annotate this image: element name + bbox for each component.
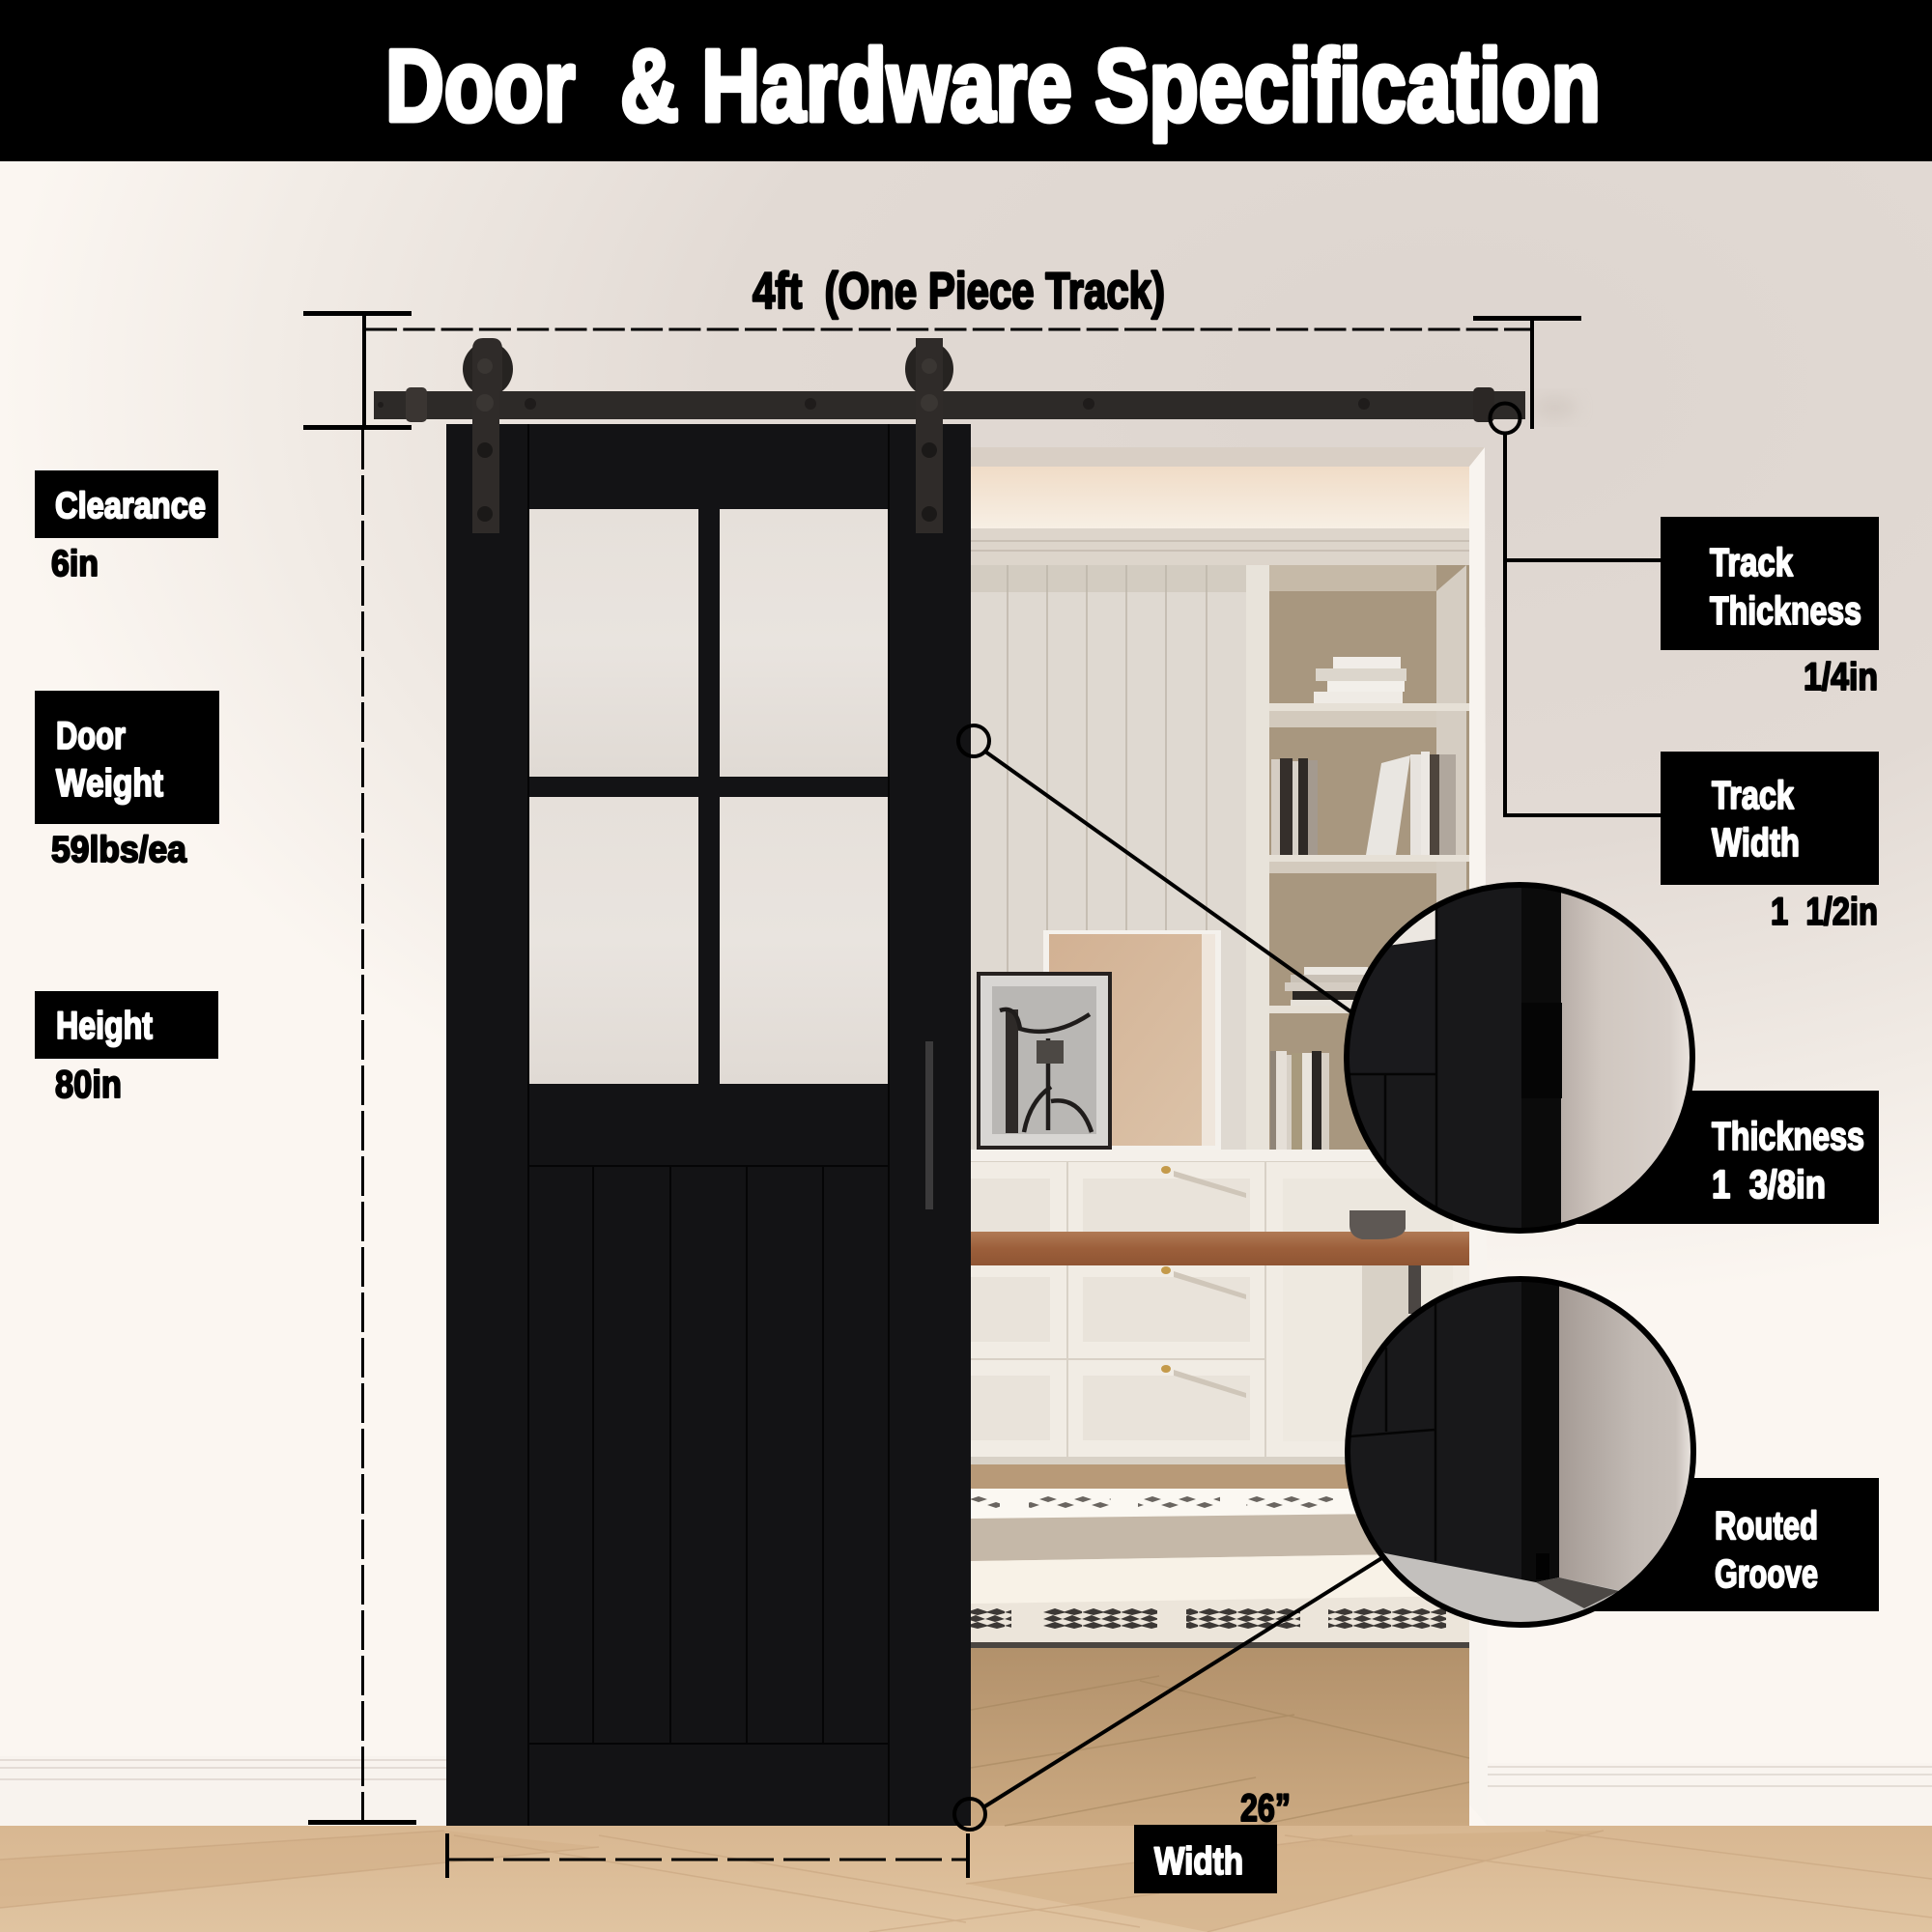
leaning beige art print [1043, 930, 1221, 1150]
rug pattern top [971, 1496, 1333, 1508]
framed bicycle photo [977, 972, 1112, 1150]
cabinet counter and drawers [971, 1150, 1469, 1468]
clearance dimension [303, 311, 412, 430]
height dimension dashed line [308, 430, 416, 1825]
baseboard left [0, 1756, 446, 1826]
track callout circle and leader lines [1490, 404, 1661, 817]
door glass panes [529, 509, 889, 1084]
bowl [1350, 1210, 1406, 1239]
detail circle: door thickness [1346, 883, 1696, 1232]
label: door weight: Weight [56, 762, 163, 805]
label: height [35, 991, 218, 1106]
floor [0, 1826, 1932, 1932]
label: clearance [35, 470, 218, 584]
floor and rug [971, 1464, 1469, 1826]
door panel grooves [528, 424, 889, 1826]
label: track thickness [1661, 517, 1879, 698]
label: width [1134, 1787, 1291, 1893]
thickness label box [1546, 1091, 1879, 1224]
left hanger strap [472, 338, 502, 533]
desk leg [1408, 1265, 1421, 1314]
width dimension dashed line [445, 1833, 970, 1878]
marker circle upper door edge with leader [958, 725, 1354, 1014]
books [1270, 657, 1456, 1150]
title bar [0, 0, 1932, 161]
label: track width: 1 1/2in [1771, 891, 1878, 933]
label: clearance: 6in [51, 544, 99, 584]
left stop [406, 387, 427, 422]
label: door weight: Door [56, 715, 126, 757]
title text: Door & Hardware Specification [385, 29, 1601, 143]
label: track width: Track [1712, 773, 1794, 817]
label: width: 26” [1240, 1787, 1291, 1830]
label: thickness: 1 3/8in [1712, 1162, 1826, 1207]
label: height: Height [56, 1005, 153, 1047]
label: clearance: Clearance [55, 486, 206, 526]
baseboard right [1488, 1763, 1932, 1826]
track rail with hangers [374, 338, 1525, 533]
detail circle: routed groove [1346, 1278, 1696, 1633]
label: thickness [1712, 1114, 1864, 1207]
label: track thickness: Track [1710, 540, 1793, 584]
label: routed groove [1715, 1503, 1818, 1596]
door frame right jamb [1469, 447, 1488, 1826]
label: door weight [35, 691, 219, 870]
rug pattern bottom [971, 1608, 1446, 1629]
marker circle door bottom with leader [954, 1557, 1383, 1830]
label: height: 80in [55, 1064, 122, 1106]
bookcase [1246, 565, 1469, 1164]
label: door weight: 59lbs/ea [51, 830, 187, 870]
door handle [925, 1041, 933, 1209]
right stop [1473, 387, 1494, 422]
right wheel [905, 342, 953, 396]
track length label: 4ft (One Piece Track) [753, 263, 1165, 320]
label: track thickness: Thickness [1710, 588, 1861, 633]
label: track width [1661, 752, 1879, 933]
label: routed groove: Groove [1715, 1551, 1818, 1596]
rail [374, 391, 1525, 419]
label: track thickness: 1/4in [1804, 656, 1878, 698]
label: routed groove: Routed [1715, 1503, 1818, 1548]
opening header and ceiling glow [971, 447, 1485, 565]
shadow of track end [1534, 398, 1577, 417]
paneled back wall [971, 565, 1251, 1164]
wooden desk [971, 1232, 1469, 1265]
room seen through the opening [971, 447, 1485, 1826]
track length dashed line [365, 328, 1532, 330]
label: width: Width [1154, 1840, 1243, 1883]
rail bolts [378, 398, 1370, 410]
label: thickness: Thickness [1712, 1114, 1864, 1158]
label: track width: Width [1712, 820, 1800, 865]
track right dimension [1473, 316, 1581, 429]
routed groove label box [1546, 1478, 1879, 1611]
right hanger strap [916, 338, 943, 533]
left wheel [463, 342, 513, 396]
barn door [446, 424, 971, 1826]
